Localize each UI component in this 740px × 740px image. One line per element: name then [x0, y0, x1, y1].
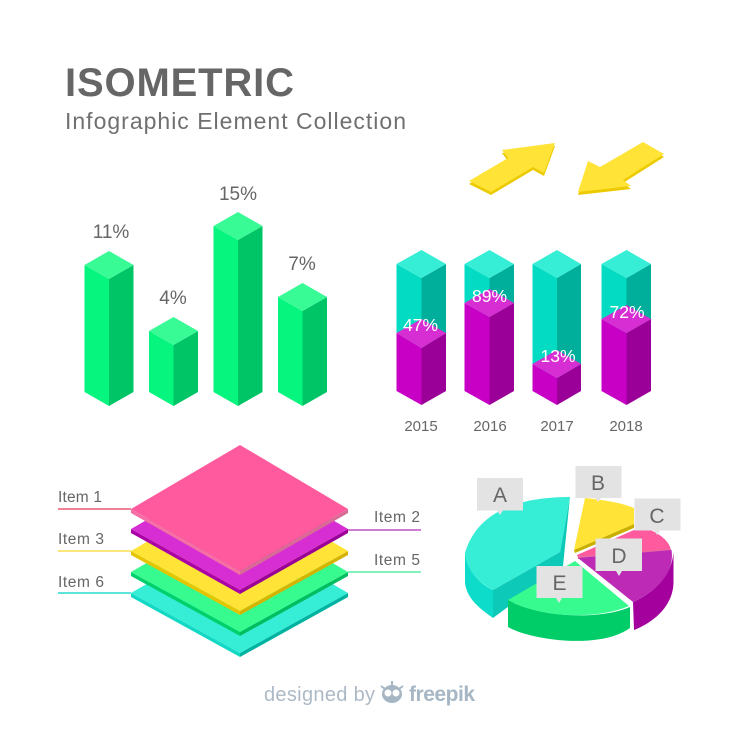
layer: item 6 teal	[58, 530, 348, 657]
callout C	[634, 498, 680, 535]
slice B yellow	[574, 498, 634, 553]
callout E	[536, 566, 582, 603]
callout B: B	[591, 472, 605, 495]
bar 2015	[396, 250, 446, 435]
slice A teal	[465, 497, 570, 618]
layered stack diagram	[58, 445, 421, 657]
bar 2016: 89%	[472, 286, 507, 306]
callout D: D	[611, 545, 627, 568]
bar 2017	[532, 250, 581, 435]
bar 11%: 11%	[93, 222, 129, 243]
bar 7%	[278, 254, 327, 406]
stacked bar chart: yearly percentages	[396, 250, 651, 435]
bar 2017: 2017	[540, 418, 574, 435]
bar 2018	[602, 250, 651, 435]
arrow: pointing up right	[469, 143, 555, 195]
layer: item 2 purple	[131, 466, 421, 594]
footer credit: designed by	[264, 684, 375, 706]
callout D	[596, 538, 642, 576]
bar 2015: 2015	[404, 418, 438, 435]
bar 2017: 13%	[540, 346, 576, 366]
bar 11%	[84, 222, 134, 406]
callout E: E	[552, 572, 567, 595]
layer: item 5 green: Item 5	[374, 552, 420, 569]
layer: item 3 yellow	[58, 488, 348, 615]
arrow: pointing down left	[578, 142, 664, 195]
layer: item 2 purple: Item 2	[374, 509, 420, 526]
slice E green	[508, 561, 630, 641]
layer: item 3 yellow: Item 3	[58, 531, 104, 548]
title: ISOMETRIC	[65, 61, 294, 105]
layer: item 1 pink: Item 1	[58, 489, 102, 506]
footer credit	[264, 681, 475, 706]
callout B	[576, 466, 622, 502]
bar 2015: 47%	[403, 315, 438, 335]
layer: item 5 green	[131, 509, 421, 636]
callout A	[477, 478, 523, 515]
bar 7%: 7%	[288, 254, 316, 275]
layer: item 6 teal: Item 6	[58, 574, 104, 591]
callout A: A	[493, 484, 507, 507]
bar 4%	[149, 288, 198, 406]
bar 4%: 4%	[159, 288, 187, 309]
bar 2018: 72%	[609, 302, 645, 322]
layer: item 1 pink	[58, 445, 348, 575]
slice D purple	[578, 550, 674, 630]
arrows panel	[469, 142, 664, 195]
bar 15%: 15%	[219, 184, 257, 205]
subtitle: Infographic Element Collection	[65, 108, 406, 134]
callout C: C	[649, 505, 665, 528]
bar 15%	[214, 184, 262, 406]
pie chart	[465, 466, 680, 641]
bar 2016	[464, 250, 514, 435]
slice C pink	[577, 530, 671, 559]
footer credit: freepik	[409, 683, 475, 706]
bar chart: green percentages	[84, 184, 327, 406]
icon: freepik mascot	[381, 681, 403, 703]
bar 2018: 2018	[609, 418, 643, 435]
bar 2016: 2016	[473, 418, 507, 435]
